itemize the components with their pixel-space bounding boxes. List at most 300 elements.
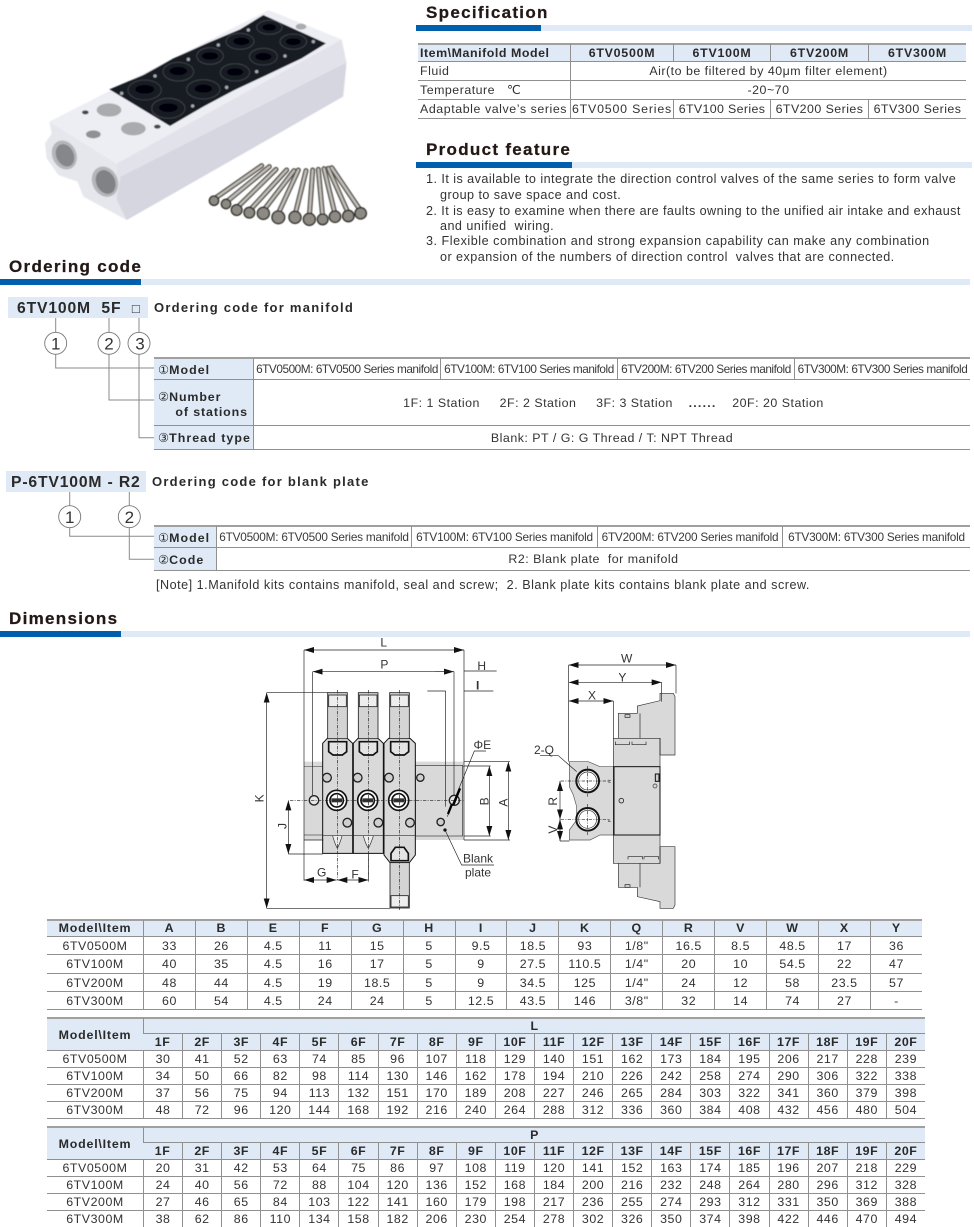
table: dimensions A to Y by model: 9.5 <box>472 939 490 953</box>
table: dimension L by stations: 258 <box>699 1068 722 1082</box>
table: dimension P by stations: 20 <box>156 1160 170 1174</box>
table: dimension L by stations: L <box>530 1019 539 1033</box>
dimension drawing: side view: R <box>546 797 560 806</box>
table: dimension L by stations: 48 <box>156 1102 170 1116</box>
table: dimension L by stations: 19F <box>855 1034 878 1048</box>
dimension drawing: top view: A <box>497 799 511 807</box>
table: dimension P by stations: 8F <box>429 1144 444 1158</box>
table: dimension P by stations: 196 <box>777 1160 800 1174</box>
table: specification: Item\Manifold Model <box>420 46 550 60</box>
dimension drawing: top view: J <box>275 823 289 829</box>
table: dimensions A to Y by model: 43.5 <box>520 994 546 1008</box>
table: manifold ordering code <box>154 357 970 450</box>
table: dimension L by stations: 16F <box>738 1034 761 1048</box>
table: dimensions A to Y by model: 19 <box>318 976 333 990</box>
table: dimensions A to Y by model: 110.5 <box>568 957 601 971</box>
table: dimensions A to Y by model: 3/8" <box>625 994 649 1008</box>
table: blank plate ordering code: 6TV100M: 6TV100 Series manifold <box>416 530 593 544</box>
table: dimension L by stations: 50 <box>195 1068 210 1082</box>
table: dimension P by stations: 278 <box>543 1212 565 1226</box>
table: dimension P by stations: 200 <box>582 1178 604 1192</box>
heading: Ordering code: Ordering code <box>9 257 142 276</box>
table: dimensions A to Y by model: - <box>894 994 899 1008</box>
table: dimension L by stations: 130 <box>386 1068 409 1082</box>
table: specification: -20~70 <box>748 82 789 96</box>
table: dimensions A to Y by model: X <box>840 921 849 935</box>
table: dimension L by stations: 341 <box>777 1086 800 1100</box>
text block: product features list: 2. It is easy to examine when there are faults owning to the unified air intake and exhaust <box>426 204 961 218</box>
table: dimension P by stations: 86 <box>390 1160 405 1174</box>
table: dimension L by stations: 3F <box>233 1034 249 1048</box>
table: dimension P by stations: 108 <box>465 1160 487 1174</box>
table: dimension P by stations: 1F <box>155 1144 170 1158</box>
table: dimensions A to Y by model: 27.5 <box>520 957 546 971</box>
table: dimension P by stations: 86 <box>234 1212 249 1226</box>
table: dimension L by stations: 6TV300M <box>66 1102 124 1116</box>
table: dimension P by stations: 216 <box>621 1178 643 1192</box>
table: dimensions A to Y by model: 16 <box>318 957 333 971</box>
dimension drawing: top view <box>252 636 512 910</box>
table: dimensions A to Y by model: 5 <box>425 994 433 1008</box>
dimension drawing: side view: 2-Q <box>534 743 554 757</box>
table: dimension P by stations: 40 <box>195 1178 210 1192</box>
table: dimension L by stations: 52 <box>234 1052 249 1066</box>
table: dimensions A to Y by model: 15 <box>370 939 385 953</box>
table: specification: Air(to be filtered by 40μm filter element) <box>649 64 888 78</box>
table: dimension P by stations: 18F <box>816 1144 839 1158</box>
table: dimension P by stations: 84 <box>273 1194 288 1208</box>
dimension drawing: top view: plate <box>465 866 491 880</box>
table: dimensions A to Y by model: 44 <box>214 976 229 990</box>
table: dimension P by stations: 27 <box>156 1194 170 1208</box>
table: dimension L by stations: 360 <box>816 1086 839 1100</box>
table: dimension L by stations: 384 <box>699 1102 722 1116</box>
table: dimension L by stations: 85 <box>351 1052 366 1066</box>
heading: Product feature: Product feature <box>426 140 571 159</box>
table: dimension L by stations: 11F <box>543 1034 565 1048</box>
table: dimension P by stations: 11F <box>543 1144 565 1158</box>
table: dimension P by stations: 296 <box>816 1178 839 1192</box>
table: dimensions A to Y by model: 22 <box>837 957 852 971</box>
table: dimension P by stations: 312 <box>856 1178 878 1192</box>
table: manifold ordering code: Blank: PT / G: G Thread / T: NPT Thread <box>491 430 733 444</box>
dimension drawing: side view: X <box>588 688 596 702</box>
table: dimensions A to Y by model: G <box>372 921 382 935</box>
table: dimension P by stations: 350 <box>816 1194 839 1208</box>
table: dimension P by stations: 470 <box>856 1212 878 1226</box>
table: dimension L by stations: 20F <box>894 1034 917 1048</box>
text block: product features list: group to save space and cost. <box>440 188 621 202</box>
text block: product features list <box>426 172 961 264</box>
table: dimension P by stations: 110 <box>270 1212 291 1226</box>
table: dimension P by stations: 248 <box>699 1178 722 1192</box>
subheading: ordering code for blank plate: Ordering code for blank plate <box>152 474 370 489</box>
table: dimension P by stations: 158 <box>347 1212 370 1226</box>
table: dimension P by stations: 120 <box>543 1160 565 1174</box>
table: dimension L by stations: 338 <box>895 1068 917 1082</box>
table: dimension P by stations: 103 <box>308 1194 331 1208</box>
table: dimension P by stations: 141 <box>582 1160 604 1174</box>
table: dimension P by stations: 207 <box>816 1160 839 1174</box>
table: dimension P by stations: 163 <box>660 1160 682 1174</box>
table: dimension L by stations: 284 <box>660 1086 682 1100</box>
table: dimensions A to Y by model: F <box>321 921 329 935</box>
table: dimension P by stations: 46 <box>195 1194 210 1208</box>
table: dimension L by stations: 336 <box>621 1102 643 1116</box>
table: dimension L by stations: 264 <box>504 1102 526 1116</box>
table: dimensions A to Y by model: 33 <box>162 939 177 953</box>
table: blank plate ordering code: 6TV300M: 6TV300 Series manifold <box>788 530 965 544</box>
table: dimension L by stations: 184 <box>699 1052 722 1066</box>
heading bar: Product feature <box>416 162 972 168</box>
table: dimension P by stations: 152 <box>465 1178 487 1192</box>
table: dimension L by stations: 15F <box>699 1034 722 1048</box>
table: specification: Temperature ℃ <box>420 82 521 96</box>
table: specification: 6TV0500 Series <box>572 102 672 116</box>
table: manifold ordering code: 1F: 1 Station 2F: 2 Station 3F: 3 Station ...... 20F: 20 Station <box>403 396 824 410</box>
table: dimensions A to Y by model: 26 <box>214 939 229 953</box>
table: dimension P by stations: 350 <box>660 1212 682 1226</box>
table: dimension L by stations: 114 <box>348 1068 369 1082</box>
table: dimension L by stations: 170 <box>426 1086 448 1100</box>
table: dimension P by stations <box>47 1126 925 1227</box>
table: dimension P by stations: 312 <box>738 1194 761 1208</box>
table: dimension P by stations: 42 <box>234 1160 249 1174</box>
dimension drawing: side view: P <box>607 819 612 822</box>
table: dimension L by stations: 118 <box>465 1052 486 1066</box>
table: dimension L by stations: 173 <box>660 1052 682 1066</box>
table: dimension L by stations: 12F <box>582 1034 605 1048</box>
table: specification: 6TV200 Series <box>776 102 863 116</box>
table: dimensions A to Y by model: 5 <box>425 939 433 953</box>
table: dimension P by stations: P <box>530 1128 539 1142</box>
table: dimensions A to Y by model: I <box>479 921 483 935</box>
table: dimensions A to Y by model: E <box>269 921 278 935</box>
table: dimension P by stations: 302 <box>582 1212 604 1226</box>
table: dimensions A to Y by model: 6TV200M <box>66 976 124 990</box>
table: dimension P by stations: 160 <box>426 1194 448 1208</box>
dimension drawing: top view: P <box>380 657 388 671</box>
table: dimensions A to Y by model: 35 <box>214 957 229 971</box>
table: dimension L by stations: 34 <box>156 1068 170 1082</box>
heading bar: Dimensions <box>0 631 970 637</box>
table: dimension L by stations: 151 <box>582 1052 604 1066</box>
table: dimensions A to Y by model: 5 <box>425 976 433 990</box>
table: dimension L by stations: 63 <box>273 1052 288 1066</box>
table: dimension L by stations: 75 <box>234 1086 249 1100</box>
heading bar: Specification <box>416 25 972 31</box>
table: dimension L by stations: 5F <box>312 1034 327 1048</box>
table: dimensions A to Y by model: A <box>165 921 174 935</box>
dimension drawing: top view: K <box>252 794 266 802</box>
table: dimension P by stations: 15F <box>699 1144 722 1158</box>
table: dimension P by stations: 174 <box>699 1160 722 1174</box>
table: dimensions A to Y by model: 93 <box>577 939 592 953</box>
table: dimension P by stations: 264 <box>738 1178 761 1192</box>
table: dimension L by stations: 30 <box>156 1052 170 1066</box>
table: dimension P by stations: 280 <box>777 1178 800 1192</box>
table: dimension P by stations: 369 <box>856 1194 878 1208</box>
code box: blank plate ordering code: P-6TV100M - R2 <box>11 474 141 491</box>
table: dimension P by stations: 75 <box>351 1160 366 1174</box>
table: dimension L by stations: 120 <box>269 1102 291 1116</box>
table: dimension P by stations: 24 <box>156 1178 170 1192</box>
table: dimension L by stations: 74 <box>312 1052 327 1066</box>
table: dimensions A to Y by model: 9 <box>477 957 485 971</box>
callouts: manifold code numbered connectors: 1 <box>51 334 60 354</box>
table: blank plate ordering code: ②Code <box>158 552 204 566</box>
table: dimension L by stations: 398 <box>895 1086 917 1100</box>
table: dimensions A to Y by model: K <box>580 921 590 935</box>
table: dimension L by stations: 178 <box>504 1068 526 1082</box>
table: dimensions A to Y by model: 17 <box>370 957 385 971</box>
table: dimension L by stations: 94 <box>273 1086 288 1100</box>
table: manifold ordering code: 6TV0500M: 6TV0500 Series manifold <box>256 362 438 376</box>
table: dimensions A to Y by model: 10 <box>733 957 748 971</box>
table: dimensions A to Y by model: 6TV0500M <box>62 939 128 953</box>
dimension drawing: top view: G <box>317 866 326 880</box>
table: dimension L by stations: 7F <box>390 1034 405 1048</box>
table: dimension P by stations: 7F <box>390 1144 405 1158</box>
table: dimension P by stations: 206 <box>426 1212 448 1226</box>
table: dimensions A to Y by model: 1/4" <box>625 976 649 990</box>
table: dimension P by stations: 14F <box>660 1144 683 1158</box>
table: dimension L by stations: 226 <box>621 1068 643 1082</box>
table: dimension P by stations: 374 <box>699 1212 722 1226</box>
table: manifold ordering code: 6TV100M: 6TV100 Series manifold <box>444 362 614 376</box>
table: blank plate ordering code <box>154 525 970 571</box>
table: dimension P by stations: 293 <box>699 1194 722 1208</box>
table: dimensions A to Y by model: 60 <box>162 994 177 1008</box>
table: dimension L by stations: 206 <box>777 1052 800 1066</box>
table: dimensions A to Y by model: Model\Item <box>59 921 131 935</box>
table: manifold ordering code: 6TV200M: 6TV200 Series manifold <box>621 362 791 376</box>
table: dimensions A to Y by model: 36 <box>889 939 904 953</box>
table: dimension L by stations: 37 <box>156 1086 170 1100</box>
table: dimension L by stations: Model\Item <box>59 1028 131 1042</box>
table: dimension L by stations: 6F <box>351 1034 366 1048</box>
table: dimension P by stations: 6TV0500M <box>62 1160 128 1174</box>
table: dimensions A to Y by model: 18.5 <box>364 976 390 990</box>
table: dimension P by stations: 120 <box>386 1178 409 1192</box>
table: dimension P by stations: 331 <box>777 1194 800 1208</box>
table: dimension L by stations: 8F <box>429 1034 444 1048</box>
table: dimension P by stations: 446 <box>816 1212 839 1226</box>
table: dimensions A to Y by model: 8.5 <box>731 939 750 953</box>
table: dimension L by stations: 41 <box>195 1052 210 1066</box>
table: dimension P by stations: 19F <box>855 1144 878 1158</box>
table: dimensions A to Y by model: 4.5 <box>264 957 283 971</box>
table: dimension P by stations: 38 <box>156 1212 170 1226</box>
table: dimensions A to Y by model: H <box>424 921 434 935</box>
table: dimensions A to Y by model: 74 <box>785 994 800 1008</box>
dimension drawing: top view: ΦE <box>474 738 491 752</box>
table: dimensions A to Y by model: 48 <box>162 976 177 990</box>
table: dimension L by stations: 113 <box>309 1086 330 1100</box>
table: dimensions A to Y by model: 125 <box>574 976 596 990</box>
code box: manifold ordering code: 6TV100M 5F □ <box>17 300 141 317</box>
table: dimension P by stations: 56 <box>234 1178 249 1192</box>
table: dimension P by stations: 53 <box>273 1160 288 1174</box>
table: dimension P by stations: 16F <box>738 1144 761 1158</box>
table: dimensions A to Y by model: 24 <box>370 994 385 1008</box>
table: dimension P by stations: 152 <box>621 1160 643 1174</box>
table: dimension P by stations: 6TV300M <box>66 1212 124 1226</box>
table: dimension L by stations: 194 <box>543 1068 565 1082</box>
heading bar: Ordering code <box>0 279 970 285</box>
callouts: manifold code numbered connectors: 3 <box>135 334 145 354</box>
table: dimension L by stations: 72 <box>195 1102 210 1116</box>
table: dimension P by stations: 179 <box>465 1194 487 1208</box>
table: dimension L by stations: 228 <box>856 1052 878 1066</box>
table: dimension P by stations: 198 <box>504 1194 526 1208</box>
table: dimensions A to Y by model: 4.5 <box>264 939 283 953</box>
table: dimensions A to Y by model: 6TV300M <box>66 994 124 1008</box>
table: dimension P by stations: 3F <box>233 1144 249 1158</box>
table: specification: 6TV300 Series <box>874 102 961 116</box>
table: dimension P by stations: 13F <box>621 1144 644 1158</box>
table: dimension L by stations: 456 <box>816 1102 839 1116</box>
table: dimension L by stations: 240 <box>465 1102 487 1116</box>
product photo: manifold block with screws <box>45 10 368 227</box>
table: dimension L by stations: 56 <box>195 1086 210 1100</box>
text block: product features list: 3. Flexible combination and strong expansion capability can make any combination <box>426 234 930 248</box>
table: dimensions A to Y by model: 27 <box>837 994 852 1008</box>
table: dimensions A to Y by model: B <box>217 921 226 935</box>
table: dimensions A to Y by model: 32 <box>681 994 696 1008</box>
dimension drawing: side view <box>534 652 676 909</box>
table: dimension L by stations: 322 <box>738 1086 761 1100</box>
table: specification: 6TV300M <box>888 46 947 60</box>
table: manifold ordering code: 6TV300M: 6TV300 Series manifold <box>798 362 967 376</box>
table: dimensions A to Y by model: 23.5 <box>831 976 858 990</box>
table: dimensions A to Y by model: 11 <box>318 939 332 953</box>
table: dimension P by stations: 10F <box>503 1144 526 1158</box>
table: specification: 6TV200M <box>790 46 849 60</box>
table: dimension P by stations: 104 <box>347 1178 370 1192</box>
table: dimensions A to Y by model: 16.5 <box>676 939 702 953</box>
table: dimensions A to Y by model <box>47 919 922 1010</box>
table: dimension L by stations: 216 <box>426 1102 448 1116</box>
table: dimension P by stations: 254 <box>504 1212 526 1226</box>
table: dimension L by stations: 227 <box>543 1086 565 1100</box>
table: dimensions A to Y by model: 4.5 <box>264 976 283 990</box>
callouts: blank plate code numbered connectors: 2 <box>125 508 134 527</box>
table: dimension P by stations: 88 <box>312 1178 327 1192</box>
table: dimension P by stations: 274 <box>660 1194 682 1208</box>
table: dimension P by stations: 388 <box>895 1194 917 1208</box>
dimension drawing: top view: F <box>351 868 359 882</box>
table: dimensions A to Y by model: 18.5 <box>520 939 546 953</box>
dimension drawing: top view: Blank <box>463 852 494 866</box>
table: specification: 6TV100M <box>692 46 751 60</box>
table: dimension L by stations: 132 <box>347 1086 370 1100</box>
table: dimension L by stations: 290 <box>777 1068 800 1082</box>
table: dimensions A to Y by model: 9 <box>477 976 485 990</box>
table: dimension P by stations: 184 <box>543 1178 565 1192</box>
table: dimension L by stations: 288 <box>543 1102 565 1116</box>
table: dimension P by stations: 217 <box>543 1194 565 1208</box>
table: dimension L by stations: 6TV0500M <box>62 1052 128 1066</box>
dimension drawing: top view: H <box>477 659 486 673</box>
table: blank plate ordering code: 6TV200M: 6TV200 Series manifold <box>602 530 778 544</box>
table: dimensions A to Y by model: 17 <box>837 939 852 953</box>
table: dimension P by stations: 134 <box>308 1212 331 1226</box>
table: dimension L by stations: 1F <box>155 1034 170 1048</box>
dimension drawing: top view: L <box>380 636 387 650</box>
table: dimension L by stations: 18F <box>816 1034 839 1048</box>
table: dimension L by stations: 208 <box>504 1086 526 1100</box>
table: dimensions A to Y by model: 6TV100M <box>66 957 124 971</box>
table: dimension P by stations: 422 <box>777 1212 800 1226</box>
table: dimension P by stations: 17F <box>777 1144 800 1158</box>
table: dimension L by stations: 13F <box>621 1034 644 1048</box>
table: specification: 6TV0500M <box>589 46 655 60</box>
table: dimension L by stations: 192 <box>386 1102 409 1116</box>
table: dimensions A to Y by model: 12.5 <box>468 994 494 1008</box>
table: dimension P by stations: 255 <box>621 1194 643 1208</box>
table: specification: 6TV100 Series <box>679 102 765 116</box>
table: dimension L by stations: 432 <box>777 1102 800 1116</box>
table: dimensions A to Y by model: 34.5 <box>520 976 546 990</box>
table: dimension L by stations <box>47 1017 925 1119</box>
table: dimension L by stations: 96 <box>390 1052 405 1066</box>
table: dimension L by stations: 246 <box>582 1086 604 1100</box>
table: dimension P by stations: 64 <box>312 1160 327 1174</box>
dimension drawing: top view: I <box>476 678 479 692</box>
table: dimension L by stations: 6TV100M <box>66 1068 124 1082</box>
heading: Dimensions: Dimensions <box>9 609 118 628</box>
table: dimensions A to Y by model: 47 <box>889 957 904 971</box>
dimension drawing: side view: W <box>621 652 633 666</box>
table: dimension L by stations: 107 <box>426 1052 448 1066</box>
table: dimension P by stations: 6TV200M <box>66 1194 124 1208</box>
table: dimensions A to Y by model: Y <box>892 921 901 935</box>
table: dimension L by stations: 265 <box>621 1086 643 1100</box>
table: manifold ordering code: ③Thread type <box>158 431 251 445</box>
table: dimension P by stations: 65 <box>234 1194 249 1208</box>
table: dimension L by stations: 306 <box>816 1068 839 1082</box>
table: dimension P by stations: 119 <box>504 1160 526 1174</box>
table: dimension L by stations: 17F <box>777 1034 800 1048</box>
text block: product features list: or expansion of the numbers of direction control valves that are connected. <box>440 250 895 264</box>
table: dimension L by stations: 312 <box>582 1102 604 1116</box>
table: dimension P by stations: 6F <box>351 1144 366 1158</box>
table: dimensions A to Y by model: Q <box>632 921 642 935</box>
table: dimension P by stations: 136 <box>426 1178 448 1192</box>
table: dimension L by stations: 242 <box>660 1068 682 1082</box>
table: dimension P by stations: 229 <box>895 1160 917 1174</box>
table: dimension L by stations: 217 <box>816 1052 839 1066</box>
table: dimension L by stations: 239 <box>895 1052 917 1066</box>
table: dimension L by stations: 82 <box>273 1068 288 1082</box>
table: dimension L by stations: 129 <box>504 1052 526 1066</box>
table: dimension P by stations: 236 <box>582 1194 604 1208</box>
table: dimension P by stations: 9F <box>468 1144 484 1158</box>
callouts: blank plate code numbered connectors <box>58 492 154 560</box>
table: blank plate ordering code: 6TV0500M: 6TV0500 Series manifold <box>219 530 409 544</box>
table: dimension L by stations: 408 <box>738 1102 761 1116</box>
table: dimension L by stations: 168 <box>347 1102 370 1116</box>
table: dimension L by stations: 140 <box>543 1052 565 1066</box>
table: dimension P by stations: 31 <box>195 1160 210 1174</box>
table: dimension L by stations: 14F <box>660 1034 683 1048</box>
dimension drawing: side view: V <box>546 826 560 834</box>
table: dimension P by stations: 2F <box>194 1144 210 1158</box>
text block: product features list: 1. It is available to integrate the direction control valves of the same series to form valve <box>426 172 956 186</box>
table: dimensions A to Y by model: 4.5 <box>264 994 283 1008</box>
heading: Specification: Specification <box>426 3 549 22</box>
